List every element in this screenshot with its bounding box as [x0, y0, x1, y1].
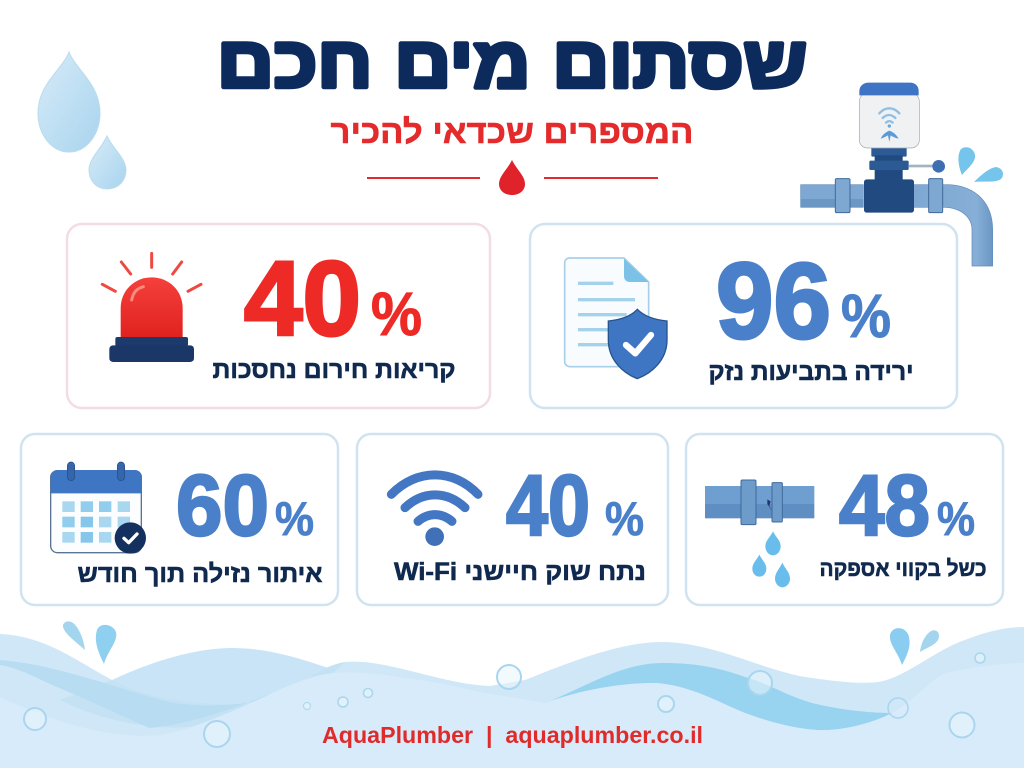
icon: calendar with check — [51, 462, 146, 554]
icon: red siren — [102, 253, 201, 362]
stat: 60 percent: % — [275, 492, 314, 545]
stat: 60 percent — [176, 458, 314, 554]
stat: 40 percent red: 40 — [244, 240, 361, 358]
panel: supply line failure — [686, 434, 1003, 605]
stat: 40 percent: 40 — [506, 458, 590, 554]
stat: 40 percent — [506, 458, 644, 554]
label: claims reduction: ירידה בתביעות נזק — [708, 358, 914, 386]
splash drops: bottom left — [63, 621, 116, 664]
panel: leak detection within a month — [21, 434, 338, 605]
label: supply line failure: כשל בקווי אספקה — [820, 556, 986, 581]
label: leak detection: איתור נזילה תוך חודש — [78, 560, 322, 588]
stat: 40 percent red — [244, 240, 422, 358]
icon: large water drop — [38, 52, 100, 152]
footer brand and website: AquaPlumber | aquaplumber.co.il — [322, 722, 703, 748]
divider with red drop — [367, 160, 658, 195]
label: emergency calls saved: קריאות חירום נחסכות — [212, 356, 456, 384]
bubbles — [24, 653, 985, 747]
panel: emergency calls — [67, 224, 490, 408]
subtitle: המספרים שכדאי להכיר — [330, 113, 694, 150]
stat: 40 percent red: % — [371, 280, 422, 348]
title: שסתום מים חכם — [217, 23, 807, 103]
stat: 40 percent: % — [605, 492, 644, 545]
stat: 96 percent — [716, 240, 891, 361]
icon: cracked pipe with drips — [705, 480, 814, 587]
footer waves — [0, 627, 1024, 768]
icon: smart valve on pipe — [801, 83, 993, 266]
splash drops: bottom right — [890, 628, 939, 665]
panel: claims reduction — [530, 224, 957, 408]
label: Wi-Fi sensors market share: נתח שוק חיישני Wi-Fi — [394, 558, 646, 586]
icon: splash beside valve — [958, 147, 1003, 182]
icon: document with shield — [565, 258, 667, 379]
icon: wifi — [391, 475, 478, 546]
stat: 96 percent: 96 — [716, 240, 831, 361]
stat: 96 percent: % — [841, 282, 891, 350]
stat: 48 percent: 48 — [839, 458, 930, 554]
icon: small water drop — [89, 136, 126, 189]
panel: Wi-Fi sensors market share — [357, 434, 668, 605]
stat: 60 percent: 60 — [176, 458, 269, 554]
stat: 48 percent: % — [937, 492, 975, 545]
